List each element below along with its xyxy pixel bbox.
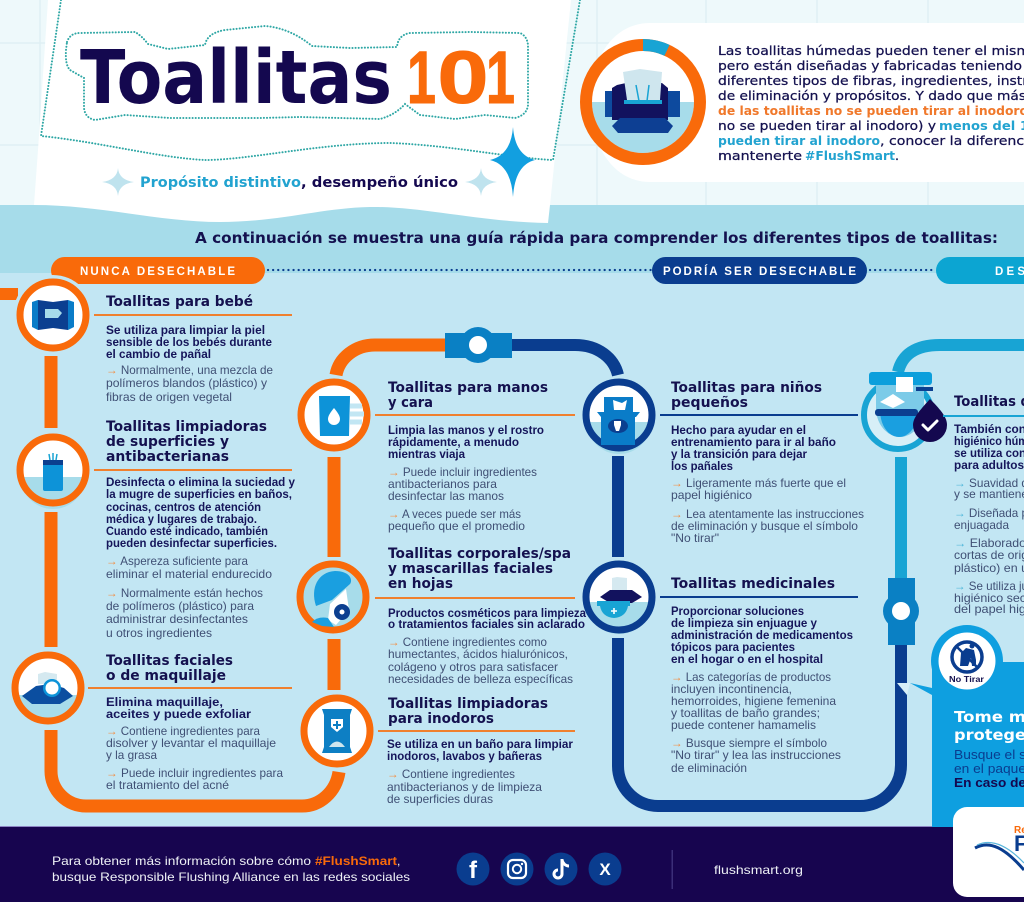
panel: medical wipes: y toallitas de baño grandes; [671,706,820,720]
text block: footer note: #FlushSmart [315,854,397,868]
panel: hand and face wipes: → Puede incluir ingredientes [388,465,537,479]
panel: baby wipes: → Normalmente, una mezcla de [106,363,273,377]
panel: surface wipes: eliminar el material endurecido [106,567,272,581]
panel: facial wipes: disolver y levantar el maquillaje [106,736,276,750]
panel: toddler wipes: Hecho para ayudar en el [671,423,806,437]
panel: medical wipes: hemorroides, higiene femenina [671,694,836,708]
pipe connector: top [445,327,512,363]
panel: baby wipes: Se utiliza para limpiar la piel [106,323,265,337]
panel: flushable wipes: para adultos [954,458,1024,472]
panel: surface wipes: → Normalmente están hechos [106,586,263,600]
panel: medical wipes [660,576,858,775]
text block: intro paragraph: pueden tirar al inodoro [718,133,880,148]
panel: title paper [34,0,580,223]
heading: guide intro: A continuación se muestra una guía rápida para comprender los diferentes tipos de toallitas: [195,229,998,247]
panel: flushable wipes: higiénico sec [954,591,1024,605]
panel: toddler wipes [660,380,864,545]
text block: intro paragraph: de eliminación y propósitos. Y dado que más [718,88,1024,103]
panel: surface wipes: Toallitas limpiadoras [106,419,267,435]
icon: sparkle left [102,168,134,196]
panel: medical wipes: tópicos para pacientes [671,640,795,654]
icon: sparkle right [465,168,497,196]
text block: intro paragraph: menos del 1 [939,118,1024,133]
icon: x: X [599,860,611,879]
text block: intro paragraph: #FlushSmart [805,148,895,163]
panel: body spa wipes and masks: Toallitas corporales/spa [388,546,571,562]
pill: never flushable [51,257,265,284]
panel: medical wipes: → Busque siempre el símbolo [671,736,827,750]
icon: toilet wipes [304,698,370,764]
subtitle: Propósito distintivo [140,175,301,191]
panel: surface wipes: de polímeros (plástico) para [106,599,254,613]
icon: sparkle large [490,127,535,197]
icon: surface wipes [20,437,86,509]
callout: no flush: Tome m [954,708,1024,726]
text block: footer note: busque Responsible Flushing Alliance en las redes sociales [52,870,410,884]
panel: intro [586,23,1024,182]
icon: spa mask [300,564,366,630]
panel: medical wipes: Toallitas medicinales [671,576,835,592]
panel: toilet wipes: Toallitas limpiadoras [388,696,548,712]
panel: baby wipes: fibras de origen vegetal [106,390,232,404]
pipe connector: right [883,578,919,645]
icon: baby wipes [13,275,93,355]
text block: intro paragraph: mantenerte [718,148,802,163]
panel: baby wipes: polímeros blandos (plástico) y [106,376,267,390]
main light blue background [0,273,1024,827]
icon: flushable wipes bowl [864,372,947,449]
text block: intro paragraph: diferentes tipos de fibras, ingredientes, instr [718,73,1024,88]
panel: body spa wipes and masks: Productos cosméticos para limpieza [388,606,586,620]
panel: surface wipes: antibacterianas [106,449,229,465]
pipe: cyan [898,345,1024,578]
text block: footer note [52,854,410,884]
icon: facebook: f [469,857,478,884]
panel: hand and face wipes: Limpia las manos y el rostro [388,423,544,437]
panel: surface wipes: Desinfecta o elimina la suciedad y [106,475,295,489]
panel: toddler wipes: entrenamiento para ir al baño [671,435,836,449]
panel: medical wipes: puede contener hamamelis [671,718,816,732]
panel: medical wipes: en el hogar o en el hospital [671,652,823,666]
panel: flushable wipes: enjuagada [954,518,1009,532]
panel: surface wipes: administrar desinfectantes [106,612,248,626]
panel: toddler wipes: y la transición para dejar [671,447,807,461]
panel: facial wipes: Toallitas faciales [106,653,233,669]
panel: medical wipes: de limpieza sin enjuague y [671,616,817,630]
pipe: navy [512,345,901,806]
panel: hand and face wipes: desinfectar las manos [388,489,504,503]
panel: baby wipes: el cambio de pañal [106,347,211,361]
title: 0 [438,36,488,119]
link: website: flushsmart.org [714,863,803,877]
panel: medical wipes: incluyen incontinencia, [671,682,792,696]
panel: body spa wipes and masks: colágeno y otros para satisfacer [388,660,558,674]
panel: surface wipes: médica y lugares de trabajo. [106,512,257,526]
panel: medical wipes: "No tirar" y lea las instrucciones [671,748,841,762]
panel: toddler wipes: "No tirar" [671,531,719,545]
panel: toilet wipes: inodoros, lavabos y bañeras [387,749,542,763]
icon: no flush symbol [938,632,996,690]
panel: body spa wipes and masks: → Contiene ingredientes como [388,635,547,649]
panel: toddler wipes: → Lea atentamente las instrucciones [671,507,864,521]
callout: no flush: protege [954,726,1024,744]
text block: intro paragraph: de las toallitas no se pueden tirar al inodoro [718,103,1024,118]
panel: flushable wipes: del papel hig [954,602,1024,616]
panel: body spa wipes and masks: necesidades de belleza específicas [388,672,573,686]
panel: facial wipes: Elimina maquillaje, [106,695,223,709]
panel: facial wipes: aceites y puede exfoliar [106,707,251,721]
panel: facial wipes: o de maquillaje [106,668,226,684]
panel: medical wipes: de eliminación [671,761,747,775]
text block: intro paragraph: Las toallitas húmedas pueden tener el mism [718,43,1024,58]
icon: toddler wipes [586,382,652,454]
pill: flushable [936,257,1024,284]
text block: intro paragraph: no se pueden tirar al inodoro) y [718,118,937,133]
subtitle: , desempeño único [301,175,458,191]
title: Toallitas [80,35,392,121]
panel: flushable wipes: plástico) en u [954,561,1024,575]
subtitle [140,175,458,191]
panel: hand and face wipes: Toallitas para manos [388,380,548,396]
panel: surface wipes: cocinas, centros de atención [106,500,261,514]
panel: surface wipes: → Aspereza suficiente para [106,554,248,568]
text block: intro paragraph: , conocer la diferenci [880,133,1024,148]
panel: medical wipes: → Las categorías de productos [671,670,831,684]
text block: footer note: Para obtener más información sobre cómo [52,854,311,868]
panel: toilet wipes: para inodoros [388,711,494,727]
panel: surface wipes: pueden desinfectar superficies. [106,536,277,550]
panel: hand and face wipes: → A veces puede ser más [388,507,521,521]
panel: hand and face wipes: rápidamente, a menudo [388,435,519,449]
title: 1 [407,36,436,119]
icon: instagram [500,852,534,886]
panel: toddler wipes: pequeños [671,395,748,411]
panel: toddler wipes: papel higiénico [671,488,752,502]
callout: no flush [897,625,1024,827]
arrow: pointer [897,683,910,695]
icon: facial wipes [15,655,81,721]
panel: facial wipes: → Puede incluir ingredientes para [106,766,283,780]
guide background band [0,205,1024,273]
title: 1 [486,36,515,119]
callout: no flush: Busque el s [954,748,1024,762]
panel: toilet wipes: → Contiene ingredientes [387,767,515,781]
panel: body spa wipes and masks [375,546,586,686]
panel: toddler wipes: Toallitas para niños [671,380,822,396]
panel: surface wipes: u otros ingredientes [106,626,212,640]
text block: intro paragraph [718,43,1024,163]
panel: medical wipes: Proporcionar soluciones [671,604,804,618]
text block: footer note: , [397,854,400,868]
panel: surface wipes: la mugre de superficies en baños, [106,487,292,501]
panel: toddler wipes: → Ligeramente más fuerte que el [671,476,846,490]
text block: intro paragraph: pero están diseñadas y fabricadas teniendo [718,58,1022,73]
panel: hand and face wipes: y cara [388,395,433,411]
pill: may be flushable: PODRÍA SER DESECHABLE [663,265,856,278]
icon: facebook [456,852,490,886]
panel: baby wipes: Toallitas para bebé [106,294,253,310]
panel: toilet wipes: antibacterianos y de limpieza [387,780,542,794]
panel: facial wipes: el tratamiento del acné [106,778,229,792]
icon: no flush symbol: No Tirar [949,675,984,684]
icon: x [588,852,622,886]
footer [0,826,1024,902]
panel: flushable wipes: → Elaborado [954,536,1024,550]
panel: facial wipes [88,653,292,792]
panel: flushable wipes [943,394,1024,616]
panel: facial wipes: → Contiene ingredientes para [106,724,260,738]
callout: no flush: En caso de [954,776,1024,790]
pill: may be flushable [652,257,867,284]
panel: body spa wipes and masks: o tratamientos faciales sin aclarado [388,617,585,631]
panel: surface wipes [94,419,295,640]
panel: body spa wipes and masks: en hojas [388,576,453,592]
panel: baby wipes: sensible de los bebés durante [106,335,272,349]
panel: toilet wipes: de superficies duras [387,792,493,806]
panel: medical wipes: administración de medicamentos [671,628,853,642]
panel: body spa wipes and masks: y mascarillas faciales [388,561,553,577]
panel: baby wipes [94,294,292,404]
panel: toilet wipes [378,696,575,806]
category bar [51,257,1024,284]
panel: hand and face wipes: pequeño que el promedio [388,519,525,533]
panel: hand and face wipes [375,380,575,533]
icon: tissue box ring [586,45,700,159]
panel: hand and face wipes: antibacterianos para [388,477,497,491]
logo card [953,807,1024,897]
pill: never flushable: NUNCA DESECHABLE [80,266,235,278]
panel: surface wipes: de superficies y [106,434,230,450]
icon: hand wipes [301,382,367,448]
callout: no flush: en el paque [954,762,1024,776]
panel: surface wipes: Cuando esté indicado, también [106,524,268,538]
icon: tiktok [544,852,578,886]
icon: medical wipes [586,564,652,634]
panel: hand and face wipes: mientras viaja [388,447,465,461]
text block: intro paragraph: . [895,148,899,163]
panel: facial wipes: y la grasa [106,748,157,762]
panel: body spa wipes and masks: humectantes, ácidos hialurónicos, [388,647,568,661]
panel: toilet wipes: Se utiliza en un baño para limpiar [387,737,573,751]
panel: toddler wipes: de eliminación y busque el símbolo [671,519,858,533]
panel: toddler wipes: los pañales [671,459,733,473]
icon: check drop [913,399,947,442]
pipe: orange [0,294,445,806]
